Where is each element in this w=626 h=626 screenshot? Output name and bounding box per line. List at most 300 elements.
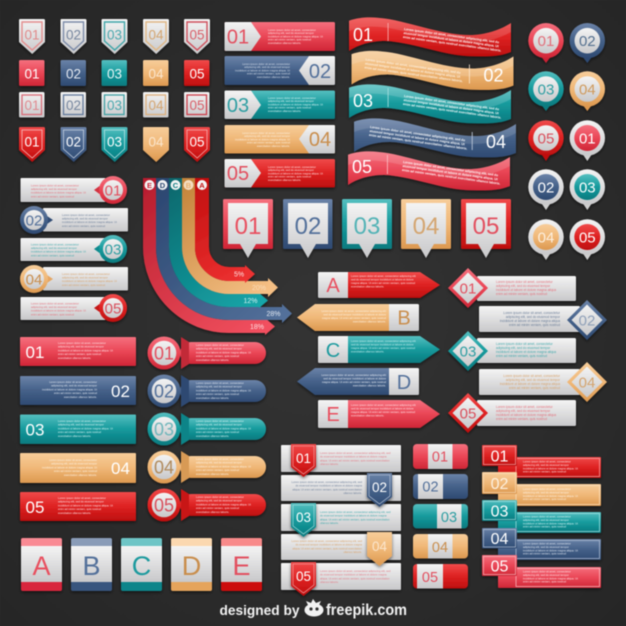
folded ribbon 01: incididunt ut labore et dolore magna aliqua. Ut — [523, 466, 578, 470]
banner 01: 01 — [353, 25, 373, 45]
arrow C: magna aliqua. Ut enim ad minim veniam, quis nostrud — [351, 346, 416, 350]
diamond bar 01: adipiscing elit, sed do eiusmod tempor — [496, 284, 551, 288]
bar texts: do eiusmod tempor incididunt ut labore et dolore magna — [296, 484, 363, 488]
speech square 01 — [223, 199, 273, 258]
banner 03: eiusmod tempor incididunt ut labore et dolore magna aliqua. Ut — [403, 98, 500, 115]
colored squares row: 03 — [107, 66, 122, 82]
diamond bar 02 — [479, 300, 607, 340]
shield tags: 02 — [372, 480, 387, 495]
diamond bar 02: 02 — [579, 312, 595, 330]
bar texts: ullamco laboris. — [320, 462, 339, 466]
band 04 — [20, 453, 136, 483]
diamond bar 03: enim ad minim veniam, quis nostrud — [496, 354, 547, 358]
bar texts: aliqua. Ut enim ad minim veniam, quis nostrud exercitation — [320, 458, 390, 462]
small pill 02 — [413, 474, 468, 499]
pin 02 white: 02 — [538, 179, 554, 196]
arrow A: exercitation ullamco laboris. — [351, 284, 384, 288]
band 04: incididunt ut labore et dolore magna aliqua. Ut — [42, 465, 97, 469]
small pill 01 — [413, 444, 468, 469]
small pill 05: 05 — [422, 570, 438, 586]
pill 03: enim ad minim veniam, quis nostrud — [196, 430, 240, 434]
pin 03 teal — [528, 71, 564, 111]
shield tags — [291, 444, 392, 596]
ribbon 01: incididunt ut labore et dolore magna aliqua. Ut — [268, 34, 323, 38]
ribbon 05: Lorem ipsum dolor sit amet, consectetur — [268, 165, 316, 169]
pill 05: adipiscing elit, sed do eiusmod tempor — [196, 499, 242, 503]
small pill 03 — [413, 504, 468, 528]
label 05: enim ad minim veniam, quis nostrud — [31, 312, 75, 316]
colored shields row: 01 — [24, 134, 40, 150]
white squares row: 02 — [66, 98, 81, 113]
diamond bar 03: adipiscing elit, sed do eiusmod tempor — [496, 346, 551, 350]
folded ribbon 01: enim ad minim veniam, quis nostrud — [523, 470, 567, 474]
arrow C: Lorem ipsum dolor sit amet, consectetur adipiscing elit — [351, 339, 416, 343]
arrow C 12% — [176, 178, 268, 308]
label 03: incididunt ut labore et dolore magna aliqua. Ut — [31, 250, 86, 254]
pin 03 teal: 03 — [538, 81, 554, 98]
small pill 04 — [413, 534, 468, 558]
colored shields row: 02 — [66, 134, 81, 150]
pill 01: 01 — [154, 344, 174, 364]
ribbon 01: adipiscing elit, sed do eiusmod tempor — [268, 31, 314, 35]
speech square 05: 05 — [473, 213, 499, 240]
tile B: B — [82, 551, 101, 581]
pill 04: adipiscing elit, sed do eiusmod tempor — [196, 461, 242, 465]
band 04: exercitation ullamco laboris. — [64, 473, 97, 477]
folded ribbon 02 — [482, 472, 601, 506]
folded ribbon 04 — [482, 528, 601, 560]
diamond bar 04: 04 — [579, 374, 595, 392]
banner 02: enim ad minim veniam, quis nostrud exercitation ullamco laboris. — [364, 65, 463, 83]
pill 02: enim ad minim veniam, quis nostrud — [196, 392, 240, 396]
folded ribbon 05 — [482, 555, 601, 588]
panel: shield and square number badges — [19, 19, 210, 162]
banner 02: Lorem ipsum dolor sit amet, consectetur adipiscing elit, sed do — [365, 58, 461, 75]
shield tags: 03 — [296, 510, 311, 525]
banner 04 — [354, 118, 516, 158]
bar texts: aliqua. Ut enim ad minim veniam, quis nostrud exercitation — [292, 546, 363, 550]
arrow D 28% — [162, 178, 292, 323]
diamond bar 03: 03 — [460, 344, 476, 360]
band 03: adipiscing elit, sed do eiusmod tempor — [58, 423, 104, 427]
label 01: adipiscing elit, sed do eiusmod tempor — [31, 187, 77, 191]
tile C — [121, 538, 162, 591]
band 02 — [20, 376, 136, 405]
label 02 — [20, 206, 128, 234]
percentage labels: 20% — [252, 285, 266, 292]
arrow D: exercitation ullamco laboris. — [353, 384, 386, 388]
ribbon 04: incididunt ut labore et dolore magna aliqua. Ut — [235, 137, 290, 141]
white squares row: 03 — [107, 98, 122, 113]
panel: circle pills — [148, 336, 266, 522]
banner 01: Lorem ipsum dolor sit amet, consectetur adipiscing elit, sed do — [404, 27, 499, 44]
banner 04: Lorem ipsum dolor sit amet, consectetur adipiscing elit, sed do — [370, 125, 465, 142]
diamond bar 02: enim ad minim veniam, quis nostrud — [509, 323, 560, 327]
band 01: exercitation ullamco laboris. — [58, 356, 91, 360]
bars group — [281, 445, 401, 590]
ribbon 03: adipiscing elit, sed do eiusmod tempor — [268, 99, 314, 103]
diamond bar 04: enim ad minim veniam, quis nostrud — [509, 386, 560, 390]
white shields row: 04 — [148, 28, 164, 42]
arrow E: E — [326, 404, 340, 426]
pin 03 white — [570, 169, 605, 210]
band 01 — [20, 337, 136, 366]
band 03: incididunt ut labore et dolore magna aliqua. Ut — [58, 426, 113, 430]
diamond bar 05: adipiscing elit, sed do eiusmod tempor — [496, 409, 551, 413]
pill 03: exercitation ullamco laboris. — [196, 434, 229, 438]
arrow A: A — [326, 275, 340, 297]
banner 03: enim ad minim veniam, quis nostrud exercitation ullamco laboris. — [403, 102, 502, 120]
folded ribbon 01 — [482, 445, 601, 478]
bar texts: do eiusmod tempor incididunt ut labore et dolore magna — [320, 514, 387, 518]
folded ribbon 05: enim ad minim veniam, quis nostrud — [523, 580, 567, 584]
panel: circle-number label bars — [20, 176, 128, 322]
pill 04: exercitation ullamco laboris. — [196, 472, 229, 476]
arrow B 20% — [188, 178, 278, 297]
letter circles: A — [199, 181, 205, 190]
pin 02 blue — [570, 23, 605, 63]
band 04: 04 — [111, 459, 130, 478]
band 01: 01 — [26, 343, 44, 362]
ribbon 05 — [224, 159, 335, 188]
band 01: Lorem ipsum dolor sit amet, consectetur — [58, 341, 106, 345]
pill 01: Lorem ipsum dolor sit amet, consectetur — [196, 343, 244, 347]
pill 05: exercitation ullamco laboris. — [196, 510, 229, 514]
pill 05: enim ad minim veniam, quis nostrud — [196, 506, 240, 510]
percentage labels: 18% — [250, 324, 264, 331]
tile C: C — [132, 551, 151, 581]
bar texts: aliqua. Ut enim ad minim veniam, quis nostrud exercitation — [320, 517, 390, 521]
pill 04: Lorem ipsum dolor sit amet, consectetur — [196, 457, 244, 461]
percentage labels: 5% — [234, 272, 244, 278]
letter circles — [144, 180, 207, 190]
pin 01 red: 01 — [538, 33, 554, 50]
letter circles: E — [147, 181, 152, 190]
folded ribbon 03: incididunt ut labore et dolore magna aliqua. Ut — [523, 521, 578, 525]
arrow A: magna aliqua. Ut enim ad minim veniam, quis nostrud — [351, 281, 416, 285]
ribbon 01: enim ad minim veniam, quis nostrud — [268, 38, 312, 42]
arrow D — [297, 368, 419, 395]
arrow A: Lorem ipsum dolor sit amet, consectetur adipiscing elit — [351, 274, 416, 278]
folded ribbon 02: 02 — [491, 476, 508, 493]
letter circles: C — [173, 181, 179, 190]
pin 03 white: 03 — [579, 179, 596, 196]
panel: stacked bars with shield tags — [281, 444, 401, 596]
pill 01 — [148, 336, 266, 370]
folded ribbon 05: Lorem ipsum dolor sit amet, consectetur — [523, 570, 571, 574]
pill 02: adipiscing elit, sed do eiusmod tempor — [196, 385, 242, 389]
ribbon 05: enim ad minim veniam, quis nostrud — [268, 175, 312, 179]
banner 01 — [349, 17, 511, 57]
band 02: adipiscing elit, sed do eiusmod tempor — [51, 384, 97, 388]
pill 04 — [148, 450, 266, 484]
diamond bar 01: enim ad minim veniam, quis nostrud — [496, 292, 547, 296]
small pill 04: 04 — [432, 540, 448, 556]
panel: small rounded number pills — [413, 444, 468, 588]
band 04: enim ad minim veniam, quis nostrud — [54, 469, 97, 473]
arrow D: magna aliqua. Ut enim ad minim veniam, quis nostrud — [322, 380, 386, 384]
pin 04 orange: 04 — [579, 81, 596, 98]
label 01: 01 — [105, 182, 121, 200]
banner 05: enim ad minim veniam, quis nostrud exercitation ullamco laboris. — [402, 168, 501, 186]
label 05 — [20, 294, 127, 322]
panel: diamond label bars — [448, 268, 607, 433]
banner 03 — [349, 84, 511, 124]
diamond bar 05: incididunt ut labore et dolore magna aliqua — [496, 413, 556, 417]
colored shields row: 05 — [189, 134, 205, 150]
label 05: Lorem ipsum dolor sit amet, consectetur — [31, 302, 79, 306]
colored shields row: 04 — [148, 134, 164, 150]
ribbon 02: adipiscing elit, sed do eiusmod tempor — [244, 65, 290, 69]
band 03: enim ad minim veniam, quis nostrud — [58, 430, 102, 434]
bar texts: ullamco laboris. — [320, 580, 339, 584]
folded ribbon 04: Lorem ipsum dolor sit amet, consectetur — [523, 542, 571, 546]
ribbon 04: exercitation ullamco laboris. — [257, 144, 290, 148]
label 01: Lorem ipsum dolor sit amet, consectetur — [31, 184, 79, 188]
tile D — [171, 538, 212, 591]
pin 01 white: 01 — [579, 130, 596, 147]
label 04: enim ad minim veniam, quis nostrud — [62, 283, 106, 287]
speech square 05 — [461, 199, 511, 258]
diamond bar 02: incididunt ut labore et dolore magna aliqua — [500, 319, 560, 323]
label 04: 04 — [26, 272, 42, 288]
diamond bar 02: Lorem ipsum dolor sit amet, consectetur — [503, 311, 561, 315]
band 05: Lorem ipsum dolor sit amet, consectetur — [58, 496, 106, 500]
panel: letter tiles — [21, 538, 262, 591]
percentage labels: 12% — [243, 298, 258, 305]
diamond bar 05: enim ad minim veniam, quis nostrud — [496, 417, 547, 421]
arrow B: B — [397, 308, 411, 330]
band 01: incididunt ut labore et dolore magna aliqua. Ut — [58, 348, 113, 352]
ribbon 03: 03 — [227, 95, 249, 117]
label 04: Lorem ipsum dolor sit amet, consectetur — [62, 272, 110, 276]
white shields row: 03 — [107, 28, 122, 42]
banner 01: eiusmod tempor incididunt ut labore et dolore magna aliqua. Ut — [403, 31, 500, 48]
speech square 03: 03 — [354, 213, 380, 240]
diamond bar 03: Lorem ipsum dolor sit amet, consectetur — [496, 342, 554, 346]
speech square 04: 04 — [413, 213, 439, 240]
label 03: adipiscing elit, sed do eiusmod tempor — [31, 246, 77, 250]
label 04: adipiscing elit, sed do eiusmod tempor — [62, 276, 108, 280]
arrow E: magna aliqua. Ut enim ad minim veniam, quis nostrud — [351, 410, 416, 414]
arrow D: D — [397, 372, 411, 394]
banner 05 — [348, 151, 510, 191]
diamond bar 03: incididunt ut labore et dolore magna aliqua — [496, 350, 556, 354]
folded ribbon 05: incididunt ut labore et dolore magna aliqua. Ut — [523, 576, 578, 580]
diamond bar 01 — [448, 268, 576, 308]
ribbon 02: incididunt ut labore et dolore magna aliqua. Ut — [235, 68, 290, 72]
banner 02 — [352, 51, 514, 90]
speech square 02 — [283, 199, 332, 258]
band 05: adipiscing elit, sed do eiusmod tempor — [58, 500, 104, 504]
bar texts: Lorem ipsum dolor sit amet, consectetur adipiscing elit, sed — [291, 539, 362, 543]
folded ribbon 04: adipiscing elit, sed do eiusmod tempor — [523, 545, 569, 549]
white shields row — [19, 19, 210, 54]
small pill 01: 01 — [432, 450, 448, 466]
pill 03: Lorem ipsum dolor sit amet, consectetur — [196, 419, 244, 423]
arrow A: sed do eiusmod tempor incididunt ut labore et dolore — [351, 278, 414, 282]
ribbon 02: exercitation ullamco laboris. — [257, 75, 290, 79]
speech square 01: 01 — [235, 213, 261, 240]
band 04: Lorem ipsum dolor sit amet, consectetur — [49, 458, 97, 462]
pin 05 white — [570, 219, 605, 260]
pill 03: incididunt ut labore et dolore magna aliqua. Ut — [196, 426, 251, 430]
label 03: Lorem ipsum dolor sit amet, consectetur — [31, 242, 79, 246]
pill 04: incididunt ut labore et dolore magna aliqua. Ut — [196, 464, 251, 468]
pill 04: enim ad minim veniam, quis nostrud — [196, 468, 240, 472]
colored squares row: 02 — [66, 66, 81, 82]
pill 01: enim ad minim veniam, quis nostrud — [196, 354, 240, 358]
pill 01: exercitation ullamco laboris. — [196, 358, 229, 362]
folded ribbon 04: incididunt ut labore et dolore magna aliqua. Ut — [523, 548, 578, 552]
bar texts: aliqua. Ut enim ad minim veniam, quis nostrud exercitation — [292, 487, 363, 491]
ribbon 03: Lorem ipsum dolor sit amet, consectetur — [268, 96, 316, 100]
label 03: enim ad minim veniam, quis nostrud — [31, 253, 75, 257]
speech square 02: 02 — [295, 213, 321, 240]
band 02: 02 — [111, 382, 130, 401]
ribbon 04: adipiscing elit, sed do eiusmod tempor — [244, 134, 290, 138]
bar texts: do eiusmod tempor incididunt ut labore et dolore magna — [320, 573, 387, 577]
diamond bar 01: incididunt ut labore et dolore magna aliqua — [496, 288, 556, 292]
arrow C: C — [326, 340, 340, 362]
folded ribbon 05: 05 — [491, 558, 508, 576]
pill 03: adipiscing elit, sed do eiusmod tempor — [196, 423, 242, 427]
pill 01: incididunt ut labore et dolore magna aliqua. Ut — [196, 350, 251, 354]
band 03: exercitation ullamco laboris. — [58, 434, 91, 438]
ribbon 04: Lorem ipsum dolor sit amet, consectetur — [242, 131, 290, 135]
label 03: 03 — [105, 242, 121, 258]
tile B — [71, 538, 112, 591]
folded ribbon 01: 01 — [491, 448, 508, 466]
percentage labels — [234, 272, 281, 331]
bar texts: ullamco laboris. — [343, 550, 362, 554]
ribbon 04: 04 — [309, 129, 331, 151]
folded ribbon 03 — [482, 500, 601, 533]
diamond bar 05: 05 — [460, 406, 476, 422]
pill 03 — [148, 412, 266, 446]
panel: wavy banners — [348, 17, 516, 191]
diamond bar 01: 01 — [460, 280, 476, 298]
arrow A 5% — [202, 178, 255, 283]
ribbon 04 — [224, 125, 335, 154]
arrow C: exercitation ullamco laboris. — [351, 350, 384, 354]
ribbon 03: enim ad minim veniam, quis nostrud — [268, 106, 312, 110]
band 01: enim ad minim veniam, quis nostrud — [58, 352, 102, 356]
pill 05: incididunt ut labore et dolore magna aliqua. Ut — [196, 502, 251, 506]
panel: speech squares — [223, 199, 511, 258]
folded ribbon 02: incididunt ut labore et dolore magna aliqua. Ut — [523, 494, 578, 498]
diamond bar 01: Lorem ipsum dolor sit amet, consectetur — [496, 280, 554, 284]
pin 02 blue: 02 — [579, 33, 596, 50]
pin 05 red: 05 — [538, 130, 554, 147]
label 04 — [20, 265, 128, 293]
colored squares row: 04 — [148, 66, 164, 82]
tile A — [21, 538, 62, 591]
folded ribbon 04: 04 — [491, 531, 508, 548]
ribbon 03: incididunt ut labore et dolore magna aliqua. Ut — [268, 102, 323, 106]
ribbon 01 — [224, 22, 335, 51]
tile E: E — [232, 551, 251, 581]
folded ribbon 04: enim ad minim veniam, quis nostrud — [523, 552, 567, 556]
panel: letter arrows — [297, 272, 440, 428]
pin 04 white — [528, 219, 564, 260]
pin 04 orange — [570, 71, 605, 111]
band 04: adipiscing elit, sed do eiusmod tempor — [51, 462, 97, 466]
ribbon 01: 01 — [227, 26, 249, 48]
panel: glossy rectangular bands — [20, 337, 136, 521]
pill 02: Lorem ipsum dolor sit amet, consectetur — [196, 381, 244, 385]
banner 05: 05 — [352, 157, 372, 177]
arrow B: Lorem ipsum dolor sit amet, consectetur adipiscing elit — [321, 309, 386, 313]
diamond bar 02: adipiscing elit, sed do eiusmod tempor — [506, 315, 561, 319]
pin 02 white — [528, 169, 564, 210]
arrow E: exercitation ullamco laboris. — [351, 414, 384, 418]
band 02: enim ad minim veniam, quis nostrud — [54, 391, 97, 395]
pill 02: incididunt ut labore et dolore magna aliqua. Ut — [196, 388, 251, 392]
diamond bar 03 — [448, 331, 576, 371]
panel: map pins — [528, 23, 605, 260]
colored shields row — [19, 127, 210, 162]
folded ribbon 03: Lorem ipsum dolor sit amet, consectetur — [523, 514, 571, 518]
band 01: adipiscing elit, sed do eiusmod tempor — [58, 345, 104, 349]
pin 05 white: 05 — [579, 229, 596, 246]
banner 02: 02 — [483, 66, 504, 86]
banner 04: enim ad minim veniam, quis nostrud exercitation ullamco laboris. — [369, 133, 468, 151]
colored shields row: 03 — [107, 134, 122, 150]
colored squares row: 05 — [189, 66, 205, 82]
band 05: exercitation ullamco laboris. — [58, 511, 91, 515]
arrow D: sed do eiusmod tempor incididunt ut labore et dolore — [323, 376, 386, 380]
white shields row: 02 — [66, 28, 81, 42]
pin 05 red — [528, 120, 564, 161]
speech square 04 — [401, 199, 451, 258]
band 05: enim ad minim veniam, quis nostrud — [58, 507, 102, 511]
white shields row: 01 — [24, 28, 40, 42]
ribbon 01: exercitation ullamco laboris. — [268, 41, 301, 45]
label 02: incididunt ut labore et dolore magna aliqua. Ut — [62, 220, 117, 224]
arrow E — [318, 400, 440, 428]
shield tags: 05 — [296, 569, 311, 584]
arrow E: sed do eiusmod tempor incididunt ut labore et dolore — [351, 406, 414, 410]
diamond bar 05: Lorem ipsum dolor sit amet, consectetur — [496, 405, 554, 409]
band 05: 05 — [26, 498, 44, 517]
colored squares row — [19, 60, 210, 86]
pill 02 — [148, 374, 266, 408]
band 03: Lorem ipsum dolor sit amet, consectetur — [58, 419, 106, 423]
bar texts: ullamco laboris. — [320, 521, 339, 525]
small pill 05 — [413, 564, 468, 588]
ribbon 05: adipiscing elit, sed do eiusmod tempor — [268, 168, 314, 172]
banner 03: 03 — [353, 91, 373, 111]
bar texts — [291, 451, 391, 584]
ribbon 02: 02 — [309, 61, 331, 83]
small pill 02: 02 — [422, 480, 439, 496]
label 05: incididunt ut labore et dolore magna aliqua. Ut — [31, 309, 86, 313]
label 01: incididunt ut labore et dolore magna aliqua. Ut — [31, 191, 86, 195]
white squares row: 01 — [24, 98, 40, 113]
pin 01 white — [570, 120, 605, 161]
banner 03: Lorem ipsum dolor sit amet, consectetur adipiscing elit, sed do — [404, 94, 499, 111]
bar texts: Lorem ipsum dolor sit amet, consectetur adipiscing elit, sed — [320, 451, 391, 455]
band 02: exercitation ullamco laboris. — [64, 395, 97, 399]
label 02: 02 — [26, 212, 42, 230]
ribbon 01: Lorem ipsum dolor sit amet, consectetur — [268, 28, 316, 32]
folded ribbon 03: enim ad minim veniam, quis nostrud — [523, 525, 567, 529]
white shields row: 05 — [189, 28, 205, 42]
pill 03: 03 — [154, 420, 174, 440]
band 02: incididunt ut labore et dolore magna aliqua. Ut — [42, 387, 97, 391]
ribbon 02 — [224, 56, 335, 85]
